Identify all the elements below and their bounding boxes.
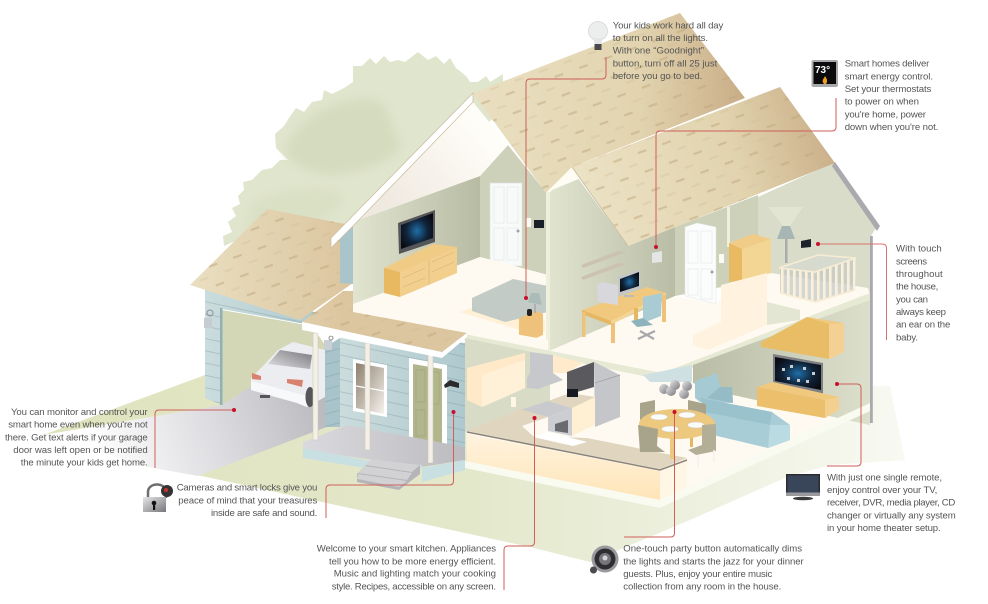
callout line: bulb [524, 57, 606, 300]
wall cut strip [546, 192, 550, 352]
callout line: kitchen [504, 416, 536, 590]
wall touch screen [398, 210, 435, 254]
kitchen wall [465, 338, 550, 432]
text: kitchen: Music and lighting match your cooking [334, 569, 496, 580]
living room TV [773, 354, 823, 395]
icon: speaker [590, 546, 618, 574]
computer monitor [618, 270, 640, 297]
front chairs [638, 424, 716, 467]
panel: upper bedroom [331, 93, 548, 352]
text: baby: you can [896, 294, 928, 305]
eave underside [353, 102, 508, 222]
kitchen device [567, 389, 578, 397]
dining table [639, 409, 715, 459]
front door [409, 358, 447, 445]
text: thermostat: Smart homes deliver [845, 59, 930, 70]
floor lip [460, 293, 870, 380]
text: lights: button, turn off all 25 just [613, 58, 718, 69]
upper kitchen cabinet [467, 353, 525, 407]
text: thermostat: you're home, power [845, 109, 927, 120]
computer tower [597, 282, 618, 305]
bedroom floor lip cover [353, 304, 548, 350]
stair rail [767, 302, 800, 325]
back counter [548, 393, 595, 408]
text: thermostat [845, 59, 938, 133]
text: lights: Your kids work hard all day [613, 20, 724, 31]
window [643, 365, 692, 382]
text: baby [896, 244, 950, 343]
TV stand [757, 382, 839, 418]
text: party [623, 544, 804, 593]
desk [582, 287, 666, 343]
callout line: baby [816, 242, 886, 340]
steps [357, 459, 420, 490]
dresser [384, 244, 457, 297]
high cabinet [761, 317, 844, 359]
text: party: the lights and starts the jazz for your dinner [623, 556, 804, 567]
porch roof [302, 291, 467, 358]
nursery dresser [729, 234, 771, 282]
text: TV [827, 472, 956, 534]
callout line: security [326, 410, 456, 518]
porch lamp [324, 336, 333, 350]
text: baby: always keep [896, 307, 946, 318]
right upper cabinet [553, 355, 583, 373]
callout line: thermostat [654, 98, 836, 249]
small gable [546, 167, 581, 193]
text: garage: the minute your kids get home. [21, 458, 148, 469]
text: TV: enjoy control over your TV, [827, 485, 937, 496]
text: garage: there. Get text alerts if your garage [5, 432, 148, 443]
door [685, 223, 716, 304]
car [251, 342, 325, 407]
touchpad [534, 220, 544, 228]
panel: front porch [302, 291, 467, 490]
living room wall [693, 300, 870, 425]
icon: thermostat: 73° [815, 65, 830, 76]
roof: front gable [572, 87, 835, 246]
text: thermostat: to power on when [845, 97, 919, 108]
text: thermostat: smart energy control. [845, 71, 933, 82]
text: TV: changer or virtually any system [827, 510, 956, 521]
floor base [465, 301, 870, 503]
light switch [526, 218, 531, 227]
panel: upper right rooms [353, 162, 880, 380]
text: kitchen: Welcome to your smart kitchen. Appliances [317, 544, 496, 555]
text: baby: an ear on the [896, 320, 950, 331]
bedroom left wall [353, 176, 480, 312]
text: party: One-touch party button automatically dims [623, 544, 802, 555]
switch [719, 254, 724, 263]
siding strip between roofs [340, 222, 353, 284]
back chairs [640, 400, 706, 420]
text: party: collection from any room in the house. [623, 582, 781, 593]
text: TV: in your home theater setup. [827, 523, 941, 534]
callout line: party [624, 410, 676, 537]
text: garage: door was left open or be notified [13, 445, 148, 456]
text: baby: baby. [896, 332, 918, 343]
bedroom back wall [480, 145, 548, 275]
gable fascia [331, 93, 473, 248]
roof: main [473, 13, 745, 193]
light switch [511, 397, 516, 407]
text: lights: With one “Goodnight” [613, 46, 704, 57]
text: garage [5, 407, 148, 469]
text: garage: smart home even when you're not [8, 420, 148, 431]
text: lights [613, 20, 724, 82]
icon: garage light [204, 310, 213, 328]
text: kitchen [317, 544, 496, 592]
front wall [340, 330, 465, 447]
ground [43, 375, 905, 562]
armchair [695, 373, 733, 403]
nursery touchpad [801, 239, 811, 248]
backsplash [567, 362, 594, 395]
thermostat device [652, 251, 662, 263]
text: lights: before you go to bed. [613, 71, 702, 82]
wall shelves [581, 251, 627, 280]
upper floor [548, 273, 870, 373]
text: garage: You can monitor and control your [11, 407, 148, 418]
kitchen base cabinet [572, 397, 595, 436]
bedroom floor [353, 257, 548, 352]
text: thermostat: down when you're not. [845, 122, 938, 133]
text: kitchen: style. Recipes, accessible on any screen. [332, 581, 496, 592]
oven [548, 408, 572, 436]
icon: thermostat [812, 60, 838, 87]
icon: television [786, 474, 820, 500]
text: TV: With just one single remote, [827, 472, 942, 483]
office wall [547, 170, 675, 352]
divider wall cut [727, 207, 730, 247]
gray fascia [832, 162, 880, 231]
floor lip [465, 403, 870, 508]
text: baby: throughout [896, 269, 943, 280]
text: security: peace of mind that your treasures [178, 495, 318, 506]
text: security: Cameras and smart locks give you [177, 483, 317, 494]
tree [223, 52, 503, 246]
stairs [693, 273, 767, 350]
counter edge [467, 432, 687, 470]
bed [460, 279, 548, 332]
text: baby: screens [896, 256, 927, 267]
window [353, 359, 387, 417]
text: lights: to turn on all the lights. [613, 33, 708, 44]
text: security: inside are safe and sound. [211, 508, 317, 519]
nightstand and lamp [519, 293, 543, 342]
stove top [520, 401, 572, 417]
garage siding [205, 288, 328, 405]
refrigerator [594, 362, 620, 427]
nursery side wall [758, 162, 877, 295]
roof: garage [190, 209, 353, 320]
panel: ground floor [465, 300, 870, 508]
nursery lamp [768, 207, 803, 263]
pendant lights [659, 380, 692, 399]
text: TV: receiver, DVR, media player, CD [827, 498, 955, 509]
callout line: garage [155, 408, 236, 468]
counter side [660, 461, 687, 503]
kitchen counter [467, 409, 687, 469]
porch slab [303, 425, 465, 482]
garage [204, 288, 328, 407]
text: security [177, 483, 318, 519]
sofa [700, 398, 790, 448]
callout line: TV [827, 382, 861, 466]
text: kitchen: tell you how to be more energy efficient. [329, 556, 496, 567]
sink [533, 432, 587, 446]
icon: light bulb [588, 22, 608, 50]
gray wall edge [870, 236, 873, 423]
driveway [43, 345, 345, 476]
text: party: guests. Plus, enjoy your entire music [623, 569, 773, 580]
back wall [675, 195, 758, 296]
porch side wall [325, 338, 340, 427]
range hood [527, 352, 563, 389]
icon: lock [143, 484, 173, 512]
garage back wall [222, 310, 325, 405]
columns [313, 333, 433, 463]
text: thermostat: Set your thermostats [845, 84, 932, 95]
plates [650, 412, 704, 432]
crib [779, 255, 856, 302]
camera [444, 380, 459, 388]
bedroom door [490, 183, 522, 266]
text: baby: With touch [896, 244, 942, 255]
counter face [467, 434, 660, 503]
text: baby: the house, [896, 282, 938, 293]
office chair [631, 293, 662, 339]
